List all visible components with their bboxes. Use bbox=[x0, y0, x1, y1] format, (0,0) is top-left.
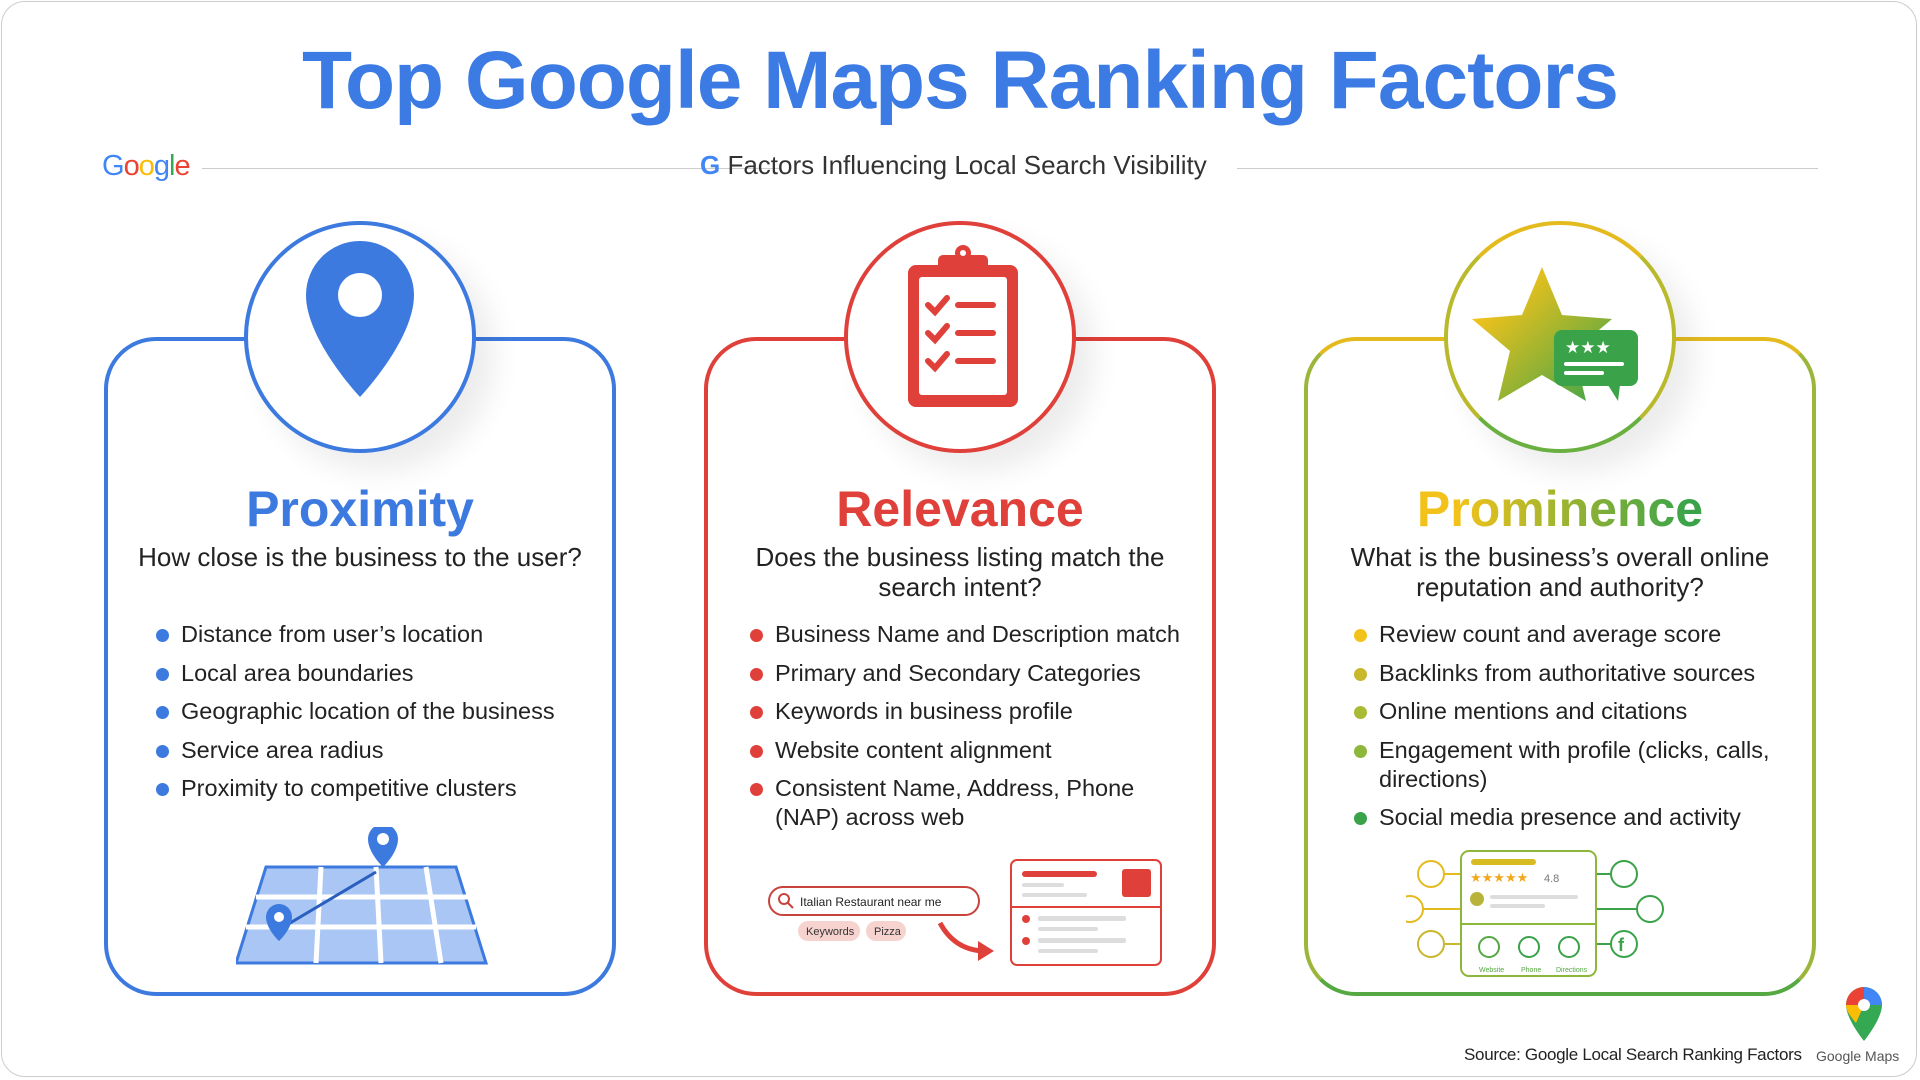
bullet list: Distance from user’s location bbox=[181, 621, 483, 647]
bullet list: Business Name and Description match bbox=[775, 621, 1180, 647]
bullet list: Social media presence and activity bbox=[1379, 804, 1741, 830]
question: How close is the business to the user? bbox=[138, 542, 582, 572]
social profile illustration: 4.8 bbox=[1544, 873, 1559, 885]
bullet list: Website content alignment bbox=[775, 736, 1052, 762]
subtitle bar bbox=[102, 150, 1818, 182]
question: reputation and authority? bbox=[1416, 572, 1704, 602]
google logo: Google bbox=[102, 150, 190, 182]
question: What is the business’s overall online bbox=[1351, 542, 1769, 572]
bullet list: Proximity to competitive clusters bbox=[181, 775, 517, 801]
map illustration bbox=[236, 827, 488, 964]
bullet list: Geographic location of the business bbox=[181, 698, 555, 724]
bullet list: directions) bbox=[1379, 766, 1487, 792]
social profile illustration: Phone bbox=[1521, 967, 1541, 974]
icon: star with review bubble: ★★★ bbox=[1565, 338, 1611, 358]
heading: prominence: Prominence bbox=[1417, 481, 1703, 537]
question bbox=[1350, 542, 1769, 602]
bullet list: Review count and average score bbox=[1379, 621, 1721, 647]
question: Does the business listing match the bbox=[756, 542, 1164, 572]
bullet list: Backlinks from authoritative sources bbox=[1379, 660, 1755, 686]
panel: relevance bbox=[704, 337, 1216, 996]
question bbox=[756, 542, 1164, 602]
icon: star with review bubble bbox=[1444, 221, 1676, 453]
google maps logo bbox=[1816, 987, 1899, 1064]
social profile illustration: Website bbox=[1479, 967, 1504, 974]
heading: relevance: Relevance bbox=[836, 481, 1084, 537]
question: search intent? bbox=[878, 572, 1042, 602]
source footnote: Source: Google Local Search Ranking Factors bbox=[1464, 1045, 1802, 1064]
search illustration: Keywords bbox=[806, 926, 855, 938]
bullet list: Local area boundaries bbox=[181, 660, 414, 686]
panel: prominence bbox=[1304, 337, 1816, 996]
bullet list: Primary and Secondary Categories bbox=[775, 660, 1141, 686]
bullet list: Service area radius bbox=[181, 736, 383, 762]
social profile illustration bbox=[1406, 850, 1664, 977]
bullet list: Engagement with profile (clicks, calls, bbox=[1379, 736, 1770, 762]
bullet list: Keywords in business profile bbox=[775, 698, 1073, 724]
heading: prominence bbox=[1304, 480, 1816, 538]
google maps logo: Google Maps bbox=[1816, 1048, 1899, 1064]
bullet list bbox=[156, 621, 555, 801]
social profile illustration: f bbox=[1618, 935, 1625, 955]
panel: proximity bbox=[104, 337, 616, 996]
title: Top Google Maps Ranking Factors bbox=[302, 35, 1618, 126]
search illustration: Italian Restaurant near me bbox=[800, 895, 942, 909]
social profile illustration: Directions bbox=[1556, 967, 1588, 974]
subtitle text: G Factors Influencing Local Search Visibility bbox=[700, 150, 1207, 180]
heading: proximity: Proximity bbox=[246, 481, 474, 537]
icon: clipboard circle bbox=[844, 221, 1076, 453]
social profile illustration: ★★★★★ bbox=[1470, 871, 1528, 886]
bullet list bbox=[1354, 621, 1770, 830]
bullet list: Online mentions and citations bbox=[1379, 698, 1687, 724]
icon: location pin circle bbox=[244, 221, 476, 453]
search illustration: Pizza bbox=[874, 926, 902, 938]
bullet list: Consistent Name, Address, Phone bbox=[775, 775, 1134, 801]
bullet list: (NAP) across web bbox=[775, 804, 964, 830]
bullet list bbox=[750, 621, 1180, 830]
search illustration bbox=[768, 859, 1162, 966]
